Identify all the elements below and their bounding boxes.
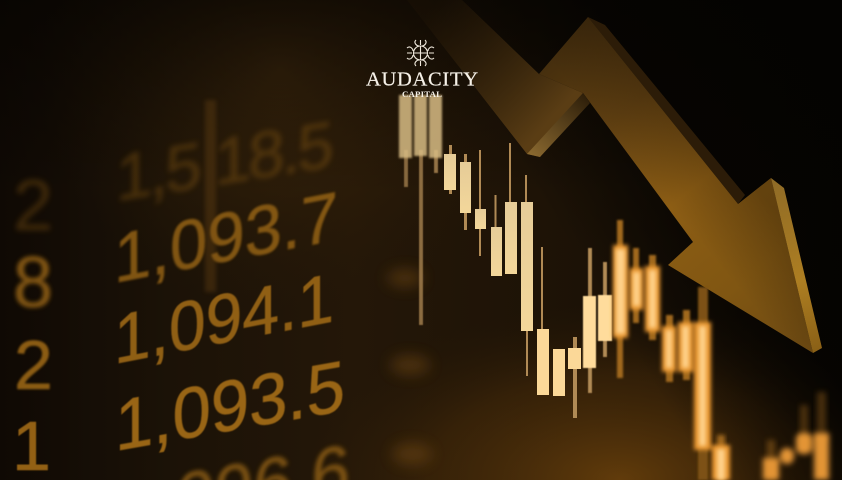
orange halo: [613, 245, 730, 480]
left column digits: 2: [14, 326, 53, 404]
price row 1,094.1: 1,094.1: [114, 258, 334, 379]
arrow head side: [771, 178, 822, 353]
left column digits: [12, 166, 53, 480]
bodies: [399, 95, 612, 396]
price row 1,093.7: 1,093.7: [114, 176, 338, 298]
left column digits: 2: [13, 166, 53, 246]
candlesticks blurred: [613, 220, 829, 480]
bright cores: [616, 249, 725, 480]
blurred reflections: [387, 269, 432, 465]
wicks: [404, 143, 607, 418]
arrow dark side: [588, 17, 745, 204]
price row 1,518.5: 1,5 18.5: [116, 108, 334, 216]
falling arrow: [407, 0, 822, 353]
price row 1,093.5: 1,093.5: [115, 346, 345, 467]
arrow face shading: [539, 17, 813, 353]
arrow upper face: [539, 17, 813, 353]
vertical bar: [205, 100, 216, 292]
logo emblem: [407, 40, 434, 66]
logo wordmark: AUDACITY: [366, 68, 478, 90]
candlesticks sharp: [399, 95, 612, 418]
logo: [366, 40, 478, 99]
logo subtitle: CAPITAL: [402, 89, 442, 99]
left column digits: 8: [13, 243, 53, 323]
ticker numbers: [12, 100, 350, 480]
arrow tail: [407, 0, 583, 157]
far right candles: [763, 433, 829, 480]
wicks: [617, 220, 826, 480]
arrow notch side: [527, 93, 590, 157]
